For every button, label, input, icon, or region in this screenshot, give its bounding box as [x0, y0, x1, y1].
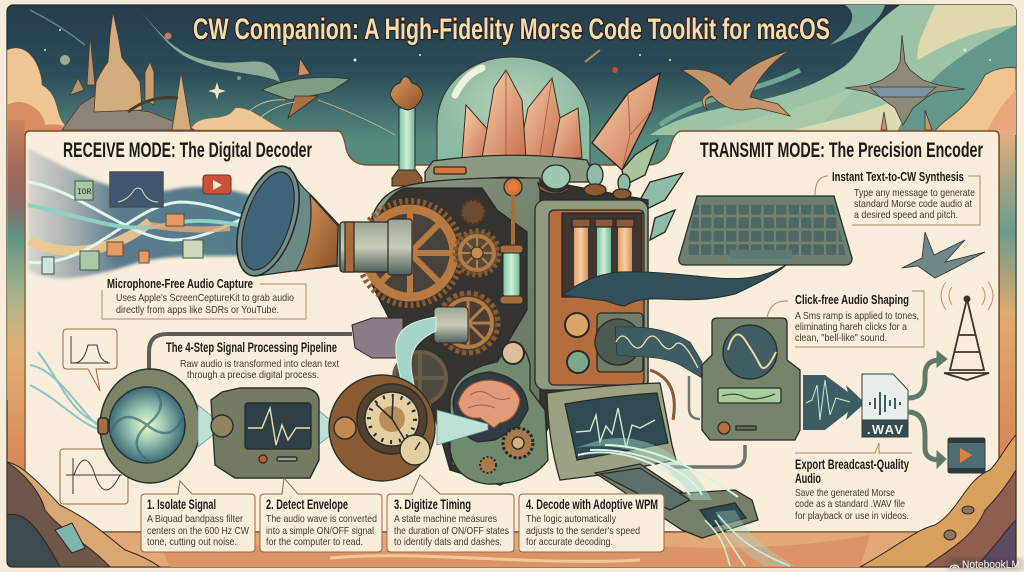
connector to machine [352, 307, 468, 385]
step 4 box: The logic automatically [526, 513, 617, 525]
step 1 box: tone, cutting out noise. [147, 536, 237, 548]
pipeline heading: through a precise digital process. [187, 369, 319, 381]
export callout: for playback or use in videos. [795, 510, 909, 522]
chart callout: waveform [60, 449, 128, 504]
pipeline heading: The 4-Step Signal Processing Pipeline [166, 340, 337, 355]
synthesis callout: Instant Text-to-CW Synthesis [832, 169, 964, 184]
audio stream with app icons [28, 148, 285, 278]
export arrows [908, 351, 947, 468]
click-free callout [767, 291, 924, 347]
castle [62, 12, 195, 130]
video icon [948, 438, 985, 473]
spaceship [245, 58, 395, 135]
side bands and bottom band [7, 120, 1016, 567]
step 3 box: the duration of ON/OFF states [394, 525, 509, 537]
chart callout: bandpass [63, 329, 117, 391]
export callout: code as a standard .WAV file [795, 498, 905, 510]
synthesis callout: Type any message to generate [854, 187, 975, 199]
step 1 box [141, 481, 255, 552]
synthesis callout: standard Morse code audio at [854, 198, 972, 210]
horn [225, 158, 412, 284]
step 1 box: A Biquad bandpass filter [147, 513, 243, 525]
export callout [795, 443, 912, 522]
encoder machine [702, 318, 800, 440]
step 2 box: into a simple ON/OFF signal [266, 525, 374, 537]
audio stream with app icons: IOR [77, 188, 92, 197]
output arrow [803, 375, 865, 430]
microphone-free callout [102, 277, 306, 319]
export callout: Save the generated Morse [795, 487, 895, 499]
decoder screen [547, 383, 676, 480]
tower icon [941, 282, 993, 380]
saucer tower [845, 35, 965, 130]
right rock terrain [860, 435, 1016, 567]
left rock terrain [7, 462, 160, 567]
output slot device and streams [575, 438, 795, 566]
step 2 box: for the computer to read. [266, 536, 363, 548]
step 4 box: adjusts to the sender's speed [526, 525, 640, 537]
pipeline heading: Raw audio is transformed into clean text [180, 358, 339, 370]
stream joins [198, 405, 488, 447]
microphone-free callout: Uses Apple's ScreenCeptureKit to grab audio [116, 292, 294, 304]
click-free callout: Click-free Audio Shaping [795, 292, 909, 307]
step 4 box: for accurate decoding. [526, 536, 613, 548]
swirl filter lens [98, 369, 200, 483]
keyboard [679, 196, 852, 265]
watermark shade [948, 558, 1022, 570]
wave tube into encoder [615, 327, 745, 467]
wav file icon [862, 374, 908, 437]
monitor unit [211, 388, 319, 478]
brain housing [450, 342, 548, 484]
pipeline pipe [149, 334, 352, 372]
click-free callout: clean, "bell-like" sound. [795, 332, 887, 344]
pipeline heading [166, 340, 339, 381]
click-free callout: eliminating hareh clicks for a [795, 321, 907, 333]
step 2 box [260, 478, 382, 552]
export callout: Export Breadcast-Quality [795, 457, 909, 472]
NotebookLM watermark: NotebookLM [962, 559, 1020, 571]
main machine body [372, 155, 648, 485]
gears [358, 200, 523, 404]
clock unit [329, 375, 435, 481]
glass dome with crystals [437, 57, 590, 165]
receive heading: RECEIVE MODE: The Digital Decoder [63, 139, 312, 162]
step 3 box: A state machine measures [394, 513, 497, 525]
step 2 box: The audio wave is converted [266, 513, 377, 525]
step 1 box: centers on the 600 Hz CW [147, 525, 249, 537]
small bird [902, 232, 985, 278]
wav file icon: .WAV [867, 422, 903, 437]
step 3 box: to identify dats and dashes. [394, 536, 502, 548]
step 1 box: 1. Isolate Signal [147, 496, 216, 512]
incoming wires [30, 352, 102, 430]
synthesis callout: a desired speed and pitch. [854, 209, 958, 221]
step 3 box: 3. Digitize Timing [394, 496, 471, 512]
pterodactyl bird [682, 50, 790, 116]
synthesis callout [815, 169, 980, 225]
click-free callout: A Sms ramp is applied to tones, [795, 310, 919, 322]
step 4 box [519, 494, 664, 552]
microphone-free callout: Microphone-Free Audio Capture [107, 277, 253, 291]
step 4 box: 4. Decode with Adoptive WPM [526, 496, 658, 512]
wind tube lamp [390, 76, 423, 186]
large crystals [592, 73, 683, 240]
panel outline with receive and transmit areas [25, 131, 999, 532]
export callout: Audio [795, 471, 821, 486]
step 2 box: 2. Detect Envelope [266, 496, 348, 512]
step 3 box [387, 475, 514, 552]
cable from keyboard [563, 265, 786, 306]
microphone-free callout: directly from apps like SDRs or YouTube. [116, 304, 279, 316]
